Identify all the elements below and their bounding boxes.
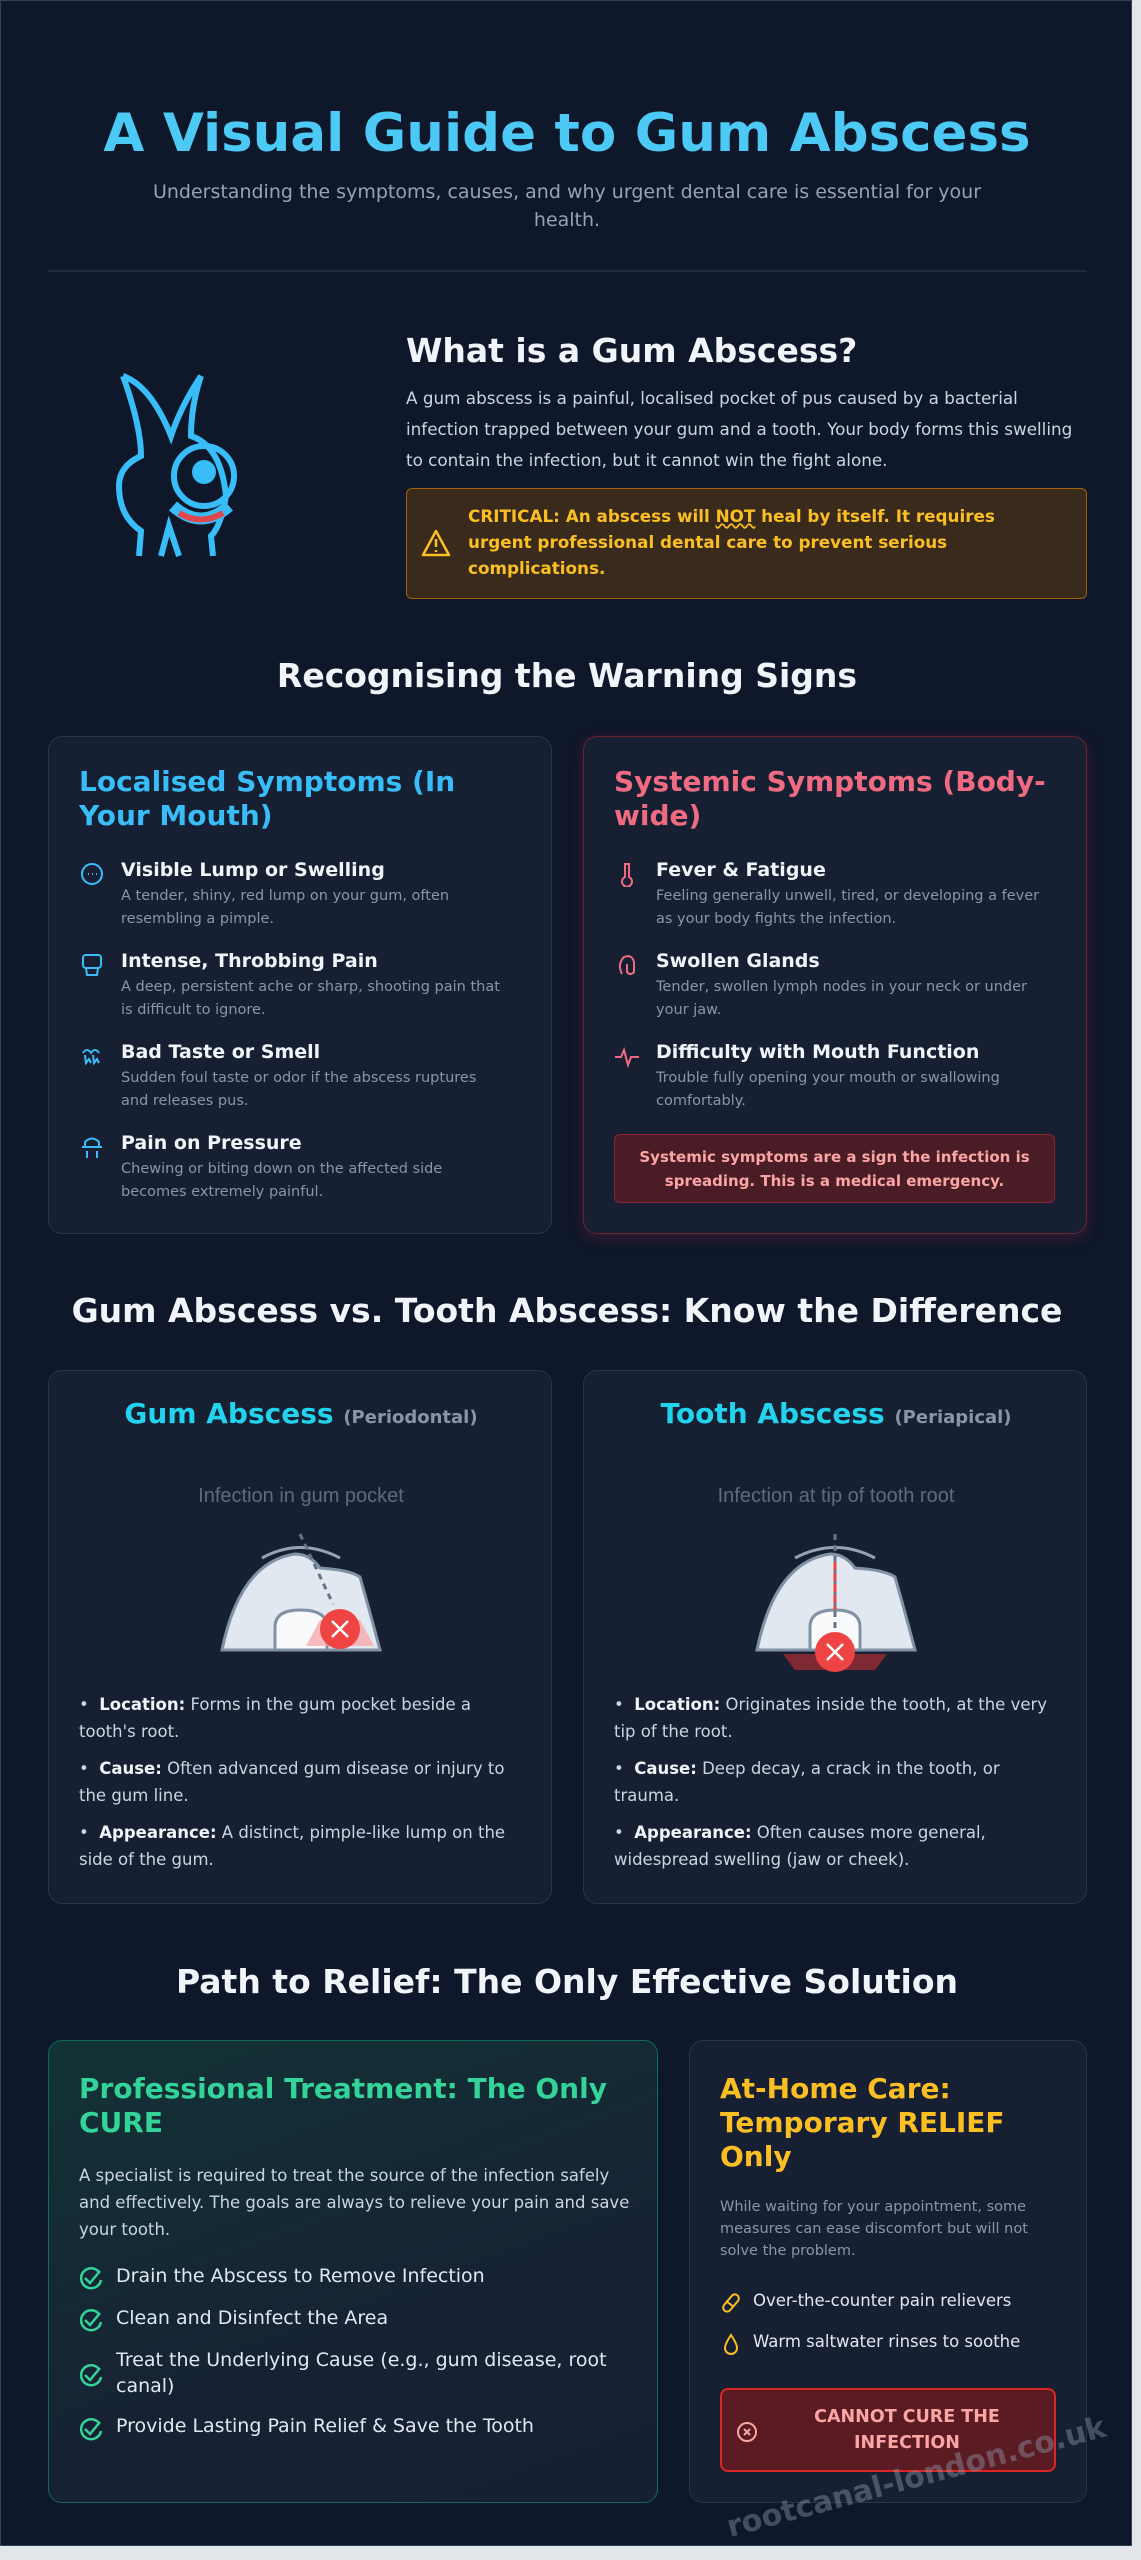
panel: tooth abscess: Tooth Abscess (Periapical) [660, 1397, 1012, 1430]
panel: professional treatment [48, 2040, 658, 2503]
text: definition: A gum abscess is a painful, localised pocket of pus caused by a bacterial infection trapped between your gum and a tooth. Your body forms this swelling to contain the infection, but it cannot win the fight alone. [406, 388, 1072, 470]
heading: what is: What is a Gum Abscess? [406, 331, 857, 370]
checklist [80, 2265, 607, 2440]
panel: at-home care: Only [720, 2140, 792, 2173]
panel: localised symptoms: Pain on Pressure [121, 1132, 302, 1154]
subtitle: Understanding the symptoms, causes, and why urgent dental care is essential for your health. [153, 181, 981, 231]
panel: professional treatment: CURE [79, 2106, 163, 2139]
panel: professional treatment: A specialist is required to treat the source of the infection safely and effectively. The goals are always to relieve your pain and save your tooth. [79, 2166, 629, 2239]
checklist: Provide Lasting Pain Relief & Save the Tooth [116, 2415, 534, 2437]
callout: emergency: Systemic symptoms are a sign the infection is spreading. This is a medical emergency. [639, 1148, 1030, 1190]
label: gum pocket: Infection in gum pocket [198, 1485, 404, 1507]
panel: localised symptoms: Chewing or biting down on the affected side becomes extremely painful. [121, 1161, 442, 1200]
panel: gum abscess: • Appearance: A distinct, pimple-like lump on the side of the gum. [79, 1823, 505, 1869]
heading: path to relief: Path to Relief: The Only Effective Solution [176, 1962, 958, 2001]
panel: localised symptoms: Sudden foul taste or odor if the abscess ruptures and releases pus. [121, 1070, 476, 1109]
panel: localised symptoms: Visible Lump or Swelling [121, 859, 385, 881]
diagram: tooth abscess [755, 1534, 917, 1672]
panel: tooth abscess: • Cause: Deep decay, a crack in the tooth, or trauma. [614, 1759, 1000, 1805]
item: pressure [82, 1132, 442, 1200]
panel: localised symptoms: A deep, persistent ache or sharp, shooting pain that is difficult to ignore. [121, 979, 500, 1018]
callout: cannot cure: CANNOT CURE THE INFECTION [814, 2407, 1000, 2453]
item: pain relievers: Over-the-counter pain relievers [753, 2291, 1011, 2310]
icon: tooth [116, 373, 237, 557]
callout: critical: CRITICAL: An abscess will NOT heal by itself. It requires urgent professional dental care to prevent serious complications. [468, 506, 995, 578]
item: fever [621, 859, 1040, 927]
panel: localised symptoms: Localised Symptoms (In [79, 765, 455, 798]
panel: localised symptoms: Your Mouth) [79, 799, 273, 832]
panel: professional treatment: Professional Treatment: The Only [79, 2072, 607, 2105]
item: taste [82, 1041, 476, 1109]
item: mouth function [615, 1041, 1000, 1109]
item: saltwater: Warm saltwater rinses to soothe [753, 2332, 1020, 2351]
watermark: rootcanal-london.co.uk [723, 2410, 1110, 2545]
heading: difference: Gum Abscess vs. Tooth Abscess: Know the Difference [72, 1291, 1062, 1330]
panel: systemic symptoms [583, 736, 1087, 1234]
panel: at-home care: Temporary RELIEF [720, 2106, 1005, 2139]
checklist: Clean and Disinfect the Area [116, 2307, 388, 2329]
item: glands [618, 950, 1027, 1018]
item: pain [82, 950, 500, 1018]
panel: localised symptoms: Intense, Throbbing Pain [121, 950, 378, 972]
checklist: Drain the Abscess to Remove Infection [116, 2265, 485, 2287]
panel: tooth abscess [583, 1370, 1087, 1904]
title: A Visual Guide to Gum Abscess [103, 103, 1031, 164]
callout: emergency [614, 1134, 1055, 1203]
panel: gum abscess [48, 1370, 552, 1904]
panel: systemic symptoms: Feeling generally unwell, tired, or developing a fever as your body fights the infection. [656, 888, 1039, 927]
callout: cannot cure [720, 2388, 1056, 2472]
panel: systemic symptoms: Difficulty with Mouth Function [656, 1041, 979, 1063]
label: root tip: Infection at tip of tooth root [718, 1485, 954, 1507]
heading: warning signs: Recognising the Warning Signs [277, 656, 857, 695]
panel: localised symptoms: Bad Taste or Smell [121, 1041, 320, 1063]
panel: systemic symptoms: Trouble fully opening your mouth or swallowing comfortably. [656, 1070, 1000, 1109]
bullets: • Location: Originates inside the tooth, at the very tip of the root. [614, 1695, 1047, 1741]
bullets: • Location: Forms in the gum pocket beside a tooth's root. [79, 1695, 471, 1741]
panel: systemic symptoms: Fever & Fatigue [656, 859, 826, 881]
checklist: Treat the Underlying Cause (e.g., gum disease, root canal) [116, 2349, 607, 2397]
panel: systemic symptoms: Systemic Symptoms (Body- [614, 765, 1046, 798]
item: lump [81, 859, 449, 927]
diagram: gum abscess [220, 1534, 382, 1652]
panel: systemic symptoms: Tender, swollen lymph nodes in your neck or under your jaw. [656, 979, 1027, 1018]
panel: localised symptoms: A tender, shiny, red lump on your gum, often resembling a pimple. [121, 888, 449, 927]
panel: gum abscess: • Cause: Often advanced gum disease or injury to the gum line. [79, 1759, 505, 1805]
icon: warning [422, 530, 450, 556]
panel: tooth abscess: • Appearance: Often causes more general, widespread swelling (jaw or cheek). [614, 1823, 986, 1869]
panel: at-home care: While waiting for your appointment, some measures can ease discomfort but will not solve the problem. [720, 2199, 1028, 2259]
panel: at-home care [689, 2040, 1087, 2503]
panel: localised symptoms [48, 736, 552, 1234]
panel: systemic symptoms: Swollen Glands [656, 950, 820, 972]
panel: at-home care: At-Home Care: [720, 2072, 951, 2105]
panel: systemic symptoms: wide) [614, 799, 701, 832]
callout: critical [406, 488, 1087, 599]
panel: gum abscess: Gum Abscess (Periodontal) [124, 1397, 478, 1430]
